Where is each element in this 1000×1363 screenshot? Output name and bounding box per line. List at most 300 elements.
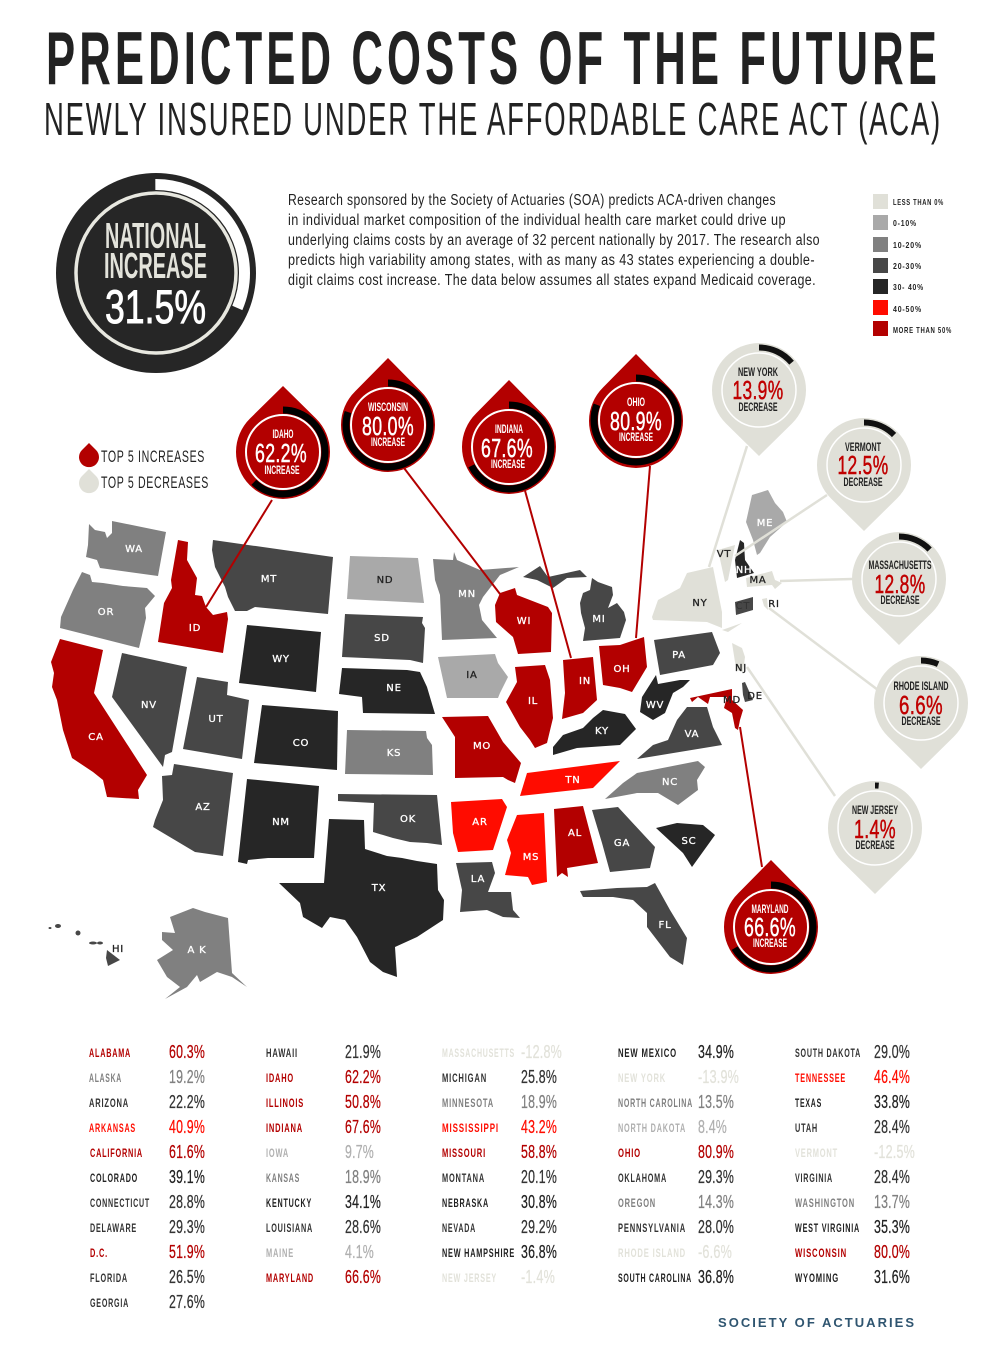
state: DE: [742, 682, 763, 702]
state: WY: [239, 625, 321, 692]
data table: column 4: [618, 1042, 739, 1287]
pin: Wisconsin: INCREASE: [371, 437, 405, 449]
row: Rhode Island: RHODE ISLAND: [618, 1246, 686, 1260]
row: Connecticut: CONNECTICUT: [90, 1196, 150, 1210]
top 5 legend: TOP 5 DECREASES: [101, 474, 209, 492]
row: Iowa: [266, 1142, 374, 1162]
row: Indiana: 67.6%: [345, 1117, 381, 1137]
colour legend: MORE THAN 50%: [893, 325, 952, 335]
state: MT: [212, 540, 333, 614]
pin: New York: 13.9%: [732, 375, 784, 405]
row: South Carolina: SOUTH CAROLINA: [618, 1271, 692, 1285]
row: West Virginia: 35.3%: [874, 1217, 910, 1237]
intro paragraph: underlying claims costs by an average of 32 percent nationally by 2017. The research also: [288, 232, 820, 249]
state: OR: OR: [98, 607, 114, 618]
row: North Carolina: 13.5%: [698, 1092, 734, 1112]
row: New Mexico: [618, 1042, 734, 1062]
row: D.C.: D.C.: [90, 1246, 108, 1260]
state: UT: UT: [208, 714, 224, 725]
row: Colorado: COLORADO: [90, 1171, 138, 1185]
state: KY: KY: [595, 726, 609, 737]
row: Nevada: NEVADA: [442, 1221, 476, 1235]
state: MA: MA: [749, 575, 767, 586]
row: New Jersey: NEW JERSEY: [442, 1271, 497, 1285]
national increase badge: 31.5%: [105, 280, 206, 333]
state: MS: MS: [523, 852, 539, 863]
pin: Wisconsin: [341, 358, 435, 472]
row: California: [90, 1142, 205, 1162]
state: AL: [554, 806, 598, 877]
row: Alaska: ALASKA: [89, 1071, 122, 1085]
row: Michigan: [442, 1067, 557, 1087]
state: IN: IN: [579, 676, 591, 687]
state: IL: [506, 665, 553, 748]
row: Idaho: 62.2%: [345, 1067, 381, 1087]
state: CO: CO: [293, 738, 309, 749]
state: MT: MT: [261, 574, 277, 585]
intro paragraph: in individual market composition of the individual health care market could drive up: [288, 212, 786, 229]
row: Illinois: 50.8%: [345, 1092, 381, 1112]
national increase badge: [56, 173, 256, 373]
row: Washington: [795, 1192, 910, 1212]
state: ND: ND: [377, 575, 393, 586]
state: OH: OH: [614, 664, 630, 675]
state: MN: MN: [458, 589, 476, 600]
row: Alabama: ALABAMA: [89, 1046, 131, 1060]
state: AR: [451, 799, 507, 852]
row: New Hampshire: NEW HAMPSHIRE: [442, 1246, 515, 1260]
state: MS: [505, 813, 547, 885]
state: TN: [520, 761, 620, 796]
state: MD: MD: [723, 695, 741, 706]
row: California: 61.6%: [169, 1142, 205, 1162]
row: Georgia: GEORGIA: [90, 1296, 129, 1310]
state: WV: WV: [646, 700, 664, 711]
row: Wisconsin: [795, 1242, 910, 1262]
state: WA: WA: [125, 544, 143, 555]
pin: Maryland: INCREASE: [753, 938, 787, 950]
pin: Indiana: INDIANA: [495, 424, 523, 436]
pin: Maryland: MARYLAND: [752, 904, 788, 916]
state: OH: [599, 637, 647, 692]
row: New York: [618, 1067, 739, 1087]
row: South Carolina: [618, 1267, 734, 1287]
state: KS: KS: [387, 748, 401, 759]
row: Pennsylvania: PENNSYLVANIA: [618, 1221, 686, 1235]
top 5 legend: [79, 443, 209, 493]
pin: Idaho: IDAHO: [272, 429, 294, 441]
data table: column 3: [442, 1042, 562, 1287]
row: Nebraska: [442, 1192, 557, 1212]
state: IA: IA: [466, 670, 478, 681]
colour legend: 0-10%: [893, 218, 917, 228]
pin: Indiana: [462, 380, 556, 494]
row: Alaska: [89, 1067, 205, 1087]
row: Hawaii: HAWAII: [266, 1046, 298, 1060]
row: New Hampshire: [442, 1242, 557, 1262]
row: Oklahoma: 29.3%: [698, 1167, 734, 1187]
map of states: [48, 490, 787, 999]
row: Oregon: 14.3%: [698, 1192, 734, 1212]
row: D.C.: 51.9%: [169, 1242, 205, 1262]
pin: New York: DECREASE: [738, 402, 778, 414]
row: Illinois: ILLINOIS: [266, 1096, 304, 1110]
row: Illinois: [266, 1092, 381, 1112]
pin: Ohio: OHIO: [627, 397, 645, 409]
pin: Massachusetts: DECREASE: [880, 595, 920, 607]
pin: New Jersey: [828, 781, 922, 894]
row: Vermont: -12.5%: [874, 1142, 915, 1162]
state: SD: SD: [374, 633, 390, 644]
state: OR: [60, 572, 155, 648]
row: Florida: FLORIDA: [90, 1271, 128, 1285]
pin: Vermont: 12.5%: [838, 450, 888, 480]
row: Mississippi: 43.2%: [521, 1117, 557, 1137]
row: Florida: 26.5%: [169, 1267, 205, 1287]
state: MO: MO: [473, 741, 491, 752]
row: Kentucky: 34.1%: [345, 1192, 381, 1212]
state: KS: [345, 730, 433, 775]
row: Delaware: [90, 1217, 205, 1237]
intro paragraph: digit claims cost increase. The data below assumes all states expand Medicaid coverage.: [288, 272, 816, 289]
row: Rhode Island: [618, 1242, 732, 1262]
top 5 legend: TOP 5 INCREASES: [101, 448, 205, 466]
state: IL: IL: [528, 696, 538, 707]
state: WV: [640, 675, 690, 720]
row: Georgia: 27.6%: [169, 1292, 205, 1312]
row: Indiana: INDIANA: [266, 1121, 303, 1135]
state: AK: [157, 908, 247, 999]
state: UT: [183, 677, 249, 759]
leader lines: [206, 446, 878, 867]
state: KY: [553, 710, 636, 755]
state: RI: RI: [768, 599, 780, 610]
state: VT: VT: [717, 549, 731, 560]
row: Massachusetts: -12.8%: [521, 1042, 562, 1062]
state: NE: [339, 668, 435, 714]
row: Wisconsin: 80.0%: [874, 1242, 910, 1262]
state: NH: NH: [736, 565, 752, 576]
state: WY: WY: [272, 654, 290, 665]
row: Maryland: [266, 1267, 381, 1287]
row: Rhode Island: -6.6%: [698, 1242, 732, 1262]
state: AZ: AZ: [195, 802, 211, 813]
pin: Indiana: INCREASE: [491, 459, 525, 471]
state: MD: [690, 689, 743, 730]
state: CO: [254, 705, 338, 770]
logo: Society of Actuaries: SOCIETY OF ACTUARIES: [718, 1315, 914, 1330]
pin: Massachusetts: 12.8%: [874, 569, 926, 599]
row: Maine: MAINE: [266, 1246, 294, 1260]
row: Minnesota: MINNESOTA: [442, 1096, 494, 1110]
row: Arkansas: ARKANSAS: [89, 1121, 136, 1135]
state: HI: [48, 924, 124, 966]
state: HI: HI: [112, 944, 124, 955]
state: OK: [338, 794, 442, 845]
pin: Wisconsin: WISCONSIN: [368, 402, 408, 414]
row: Nebraska: 30.8%: [521, 1192, 557, 1212]
pin: Ohio: [589, 354, 683, 468]
row: Kansas: 18.9%: [345, 1167, 381, 1187]
state: VT: [717, 545, 735, 582]
state: ID: ID: [189, 623, 201, 634]
row: North Dakota: [618, 1117, 727, 1137]
row: Nevada: 29.2%: [521, 1217, 557, 1237]
row: Tennessee: TENNESSEE: [795, 1071, 846, 1085]
row: Pennsylvania: [618, 1217, 734, 1237]
pin: Vermont: [817, 418, 911, 531]
pin: Wisconsin: 80.0%: [362, 411, 414, 441]
row: Idaho: IDAHO: [266, 1071, 294, 1085]
row: Iowa: IOWA: [266, 1146, 289, 1160]
state: TX: [279, 819, 444, 977]
pin: Idaho: [236, 386, 330, 499]
state: NY: [652, 567, 742, 632]
row: North Dakota: 8.4%: [698, 1117, 727, 1137]
pin: Maryland: [724, 860, 818, 974]
row: Arizona: [89, 1092, 205, 1112]
row: Connecticut: 28.8%: [169, 1192, 205, 1212]
row: Florida: [90, 1267, 205, 1287]
row: Tennessee: 46.4%: [874, 1067, 910, 1087]
state: AL: AL: [568, 828, 582, 839]
state: NE: NE: [386, 683, 402, 694]
state: CT: CT: [736, 601, 750, 612]
row: South Carolina: 36.8%: [698, 1267, 734, 1287]
state: WI: WI: [517, 616, 531, 627]
row: Oregon: [618, 1192, 734, 1212]
pin: Vermont: VERMONT: [845, 442, 881, 454]
pin: New York: NEW YORK: [738, 367, 778, 379]
row: Oklahoma: OKLAHOMA: [618, 1171, 667, 1185]
row: Arizona: 22.2%: [169, 1092, 205, 1112]
row: California: CALIFORNIA: [90, 1146, 143, 1160]
row: Montana: [442, 1167, 557, 1187]
row: Alaska: 19.2%: [169, 1067, 205, 1087]
intro paragraph: [288, 192, 820, 289]
national increase badge: NATIONAL: [105, 215, 206, 256]
row: Michigan: 25.8%: [521, 1067, 557, 1087]
state: NM: NM: [272, 817, 290, 828]
state: VA: [637, 707, 722, 759]
pin: Rhode Island: DECREASE: [902, 716, 941, 728]
state: NV: NV: [141, 700, 157, 711]
row: Kansas: [266, 1167, 381, 1187]
row: Ohio: OHIO: [618, 1146, 641, 1160]
state: NH: [735, 540, 754, 578]
row: Nevada: [442, 1217, 557, 1237]
state: AZ: [153, 764, 233, 856]
data table: column 1: [89, 1042, 205, 1312]
row: Hawaii: [266, 1042, 381, 1062]
pin: Ohio: 80.9%: [610, 406, 662, 436]
state: SD: [342, 614, 425, 663]
pin: Indiana: 67.6%: [481, 433, 533, 463]
state: ID: [158, 540, 228, 653]
row: Massachusetts: MASSACHUSETTS: [442, 1046, 515, 1060]
colour legend: 20-30%: [893, 261, 922, 271]
state: NC: [605, 761, 705, 805]
row: Washington: 13.7%: [874, 1192, 910, 1212]
row: Virginia: 28.4%: [874, 1167, 910, 1187]
state: IA: [438, 654, 508, 698]
row: Delaware: 29.3%: [169, 1217, 205, 1237]
row: Wyoming: WYOMING: [795, 1271, 839, 1285]
state: MA: [746, 571, 782, 589]
state: NY: NY: [692, 598, 708, 609]
colour legend: [873, 194, 952, 336]
colour legend: LESS THAN 0%: [893, 197, 944, 207]
row: West Virginia: [795, 1217, 910, 1237]
pin: New Jersey: 1.4%: [854, 814, 896, 844]
row: Pennsylvania: 28.0%: [698, 1217, 734, 1237]
row: Colorado: 39.1%: [169, 1167, 205, 1187]
state: WA: [86, 521, 166, 576]
row: Wisconsin: WISCONSIN: [795, 1246, 847, 1260]
colour legend: 30- 40%: [893, 282, 924, 292]
row: North Dakota: NORTH DAKOTA: [618, 1121, 686, 1135]
row: Ohio: 80.9%: [698, 1142, 734, 1162]
state: SC: [656, 823, 715, 867]
state: LA: LA: [471, 874, 485, 885]
pin: Massachusetts: [852, 532, 946, 645]
row: Louisiana: [266, 1217, 381, 1237]
row: Virginia: [795, 1167, 910, 1187]
row: Wyoming: [795, 1267, 910, 1287]
row: Idaho: [266, 1067, 381, 1087]
row: South Dakota: [795, 1042, 910, 1062]
state: PA: PA: [672, 650, 686, 661]
state: PA: [654, 632, 720, 675]
state: NJ: [732, 643, 747, 674]
row: Missouri: MISSOURI: [442, 1146, 486, 1160]
row: Utah: 28.4%: [874, 1117, 910, 1137]
state: VA: VA: [685, 729, 699, 740]
row: New Jersey: -1.4%: [521, 1267, 555, 1287]
pin: Maryland: 66.6%: [744, 912, 796, 942]
row: Montana: MONTANA: [442, 1171, 485, 1185]
row: New York: -13.9%: [698, 1067, 739, 1087]
intro paragraph: Research sponsored by the Society of Actuaries (SOA) predicts ACA-driven changes: [288, 192, 776, 209]
state: DE: DE: [747, 691, 763, 702]
state: RI: [762, 598, 780, 610]
row: Arkansas: [89, 1117, 205, 1137]
row: Maryland: MARYLAND: [266, 1271, 314, 1285]
row: Virginia: VIRGINIA: [795, 1171, 833, 1185]
row: Louisiana: LOUISIANA: [266, 1221, 313, 1235]
pin: Ohio: INCREASE: [619, 432, 653, 444]
row: Oregon: OREGON: [618, 1196, 656, 1210]
row: Utah: [795, 1117, 910, 1137]
state: MO: [442, 716, 521, 783]
row: Delaware: DELAWARE: [90, 1221, 137, 1235]
row: South Dakota: SOUTH DAKOTA: [795, 1046, 861, 1060]
pin: New York: [712, 343, 806, 456]
data table: column 5: [795, 1042, 915, 1287]
row: South Dakota: 29.0%: [874, 1042, 910, 1062]
data table: column 2: [266, 1042, 381, 1287]
state: GA: [592, 807, 655, 872]
pin: Vermont: DECREASE: [844, 477, 883, 489]
row: New Hampshire: 36.8%: [521, 1242, 557, 1262]
state: CA: [51, 639, 147, 799]
pin: Rhode Island: RHODE ISLAND: [894, 681, 948, 693]
row: Vermont: [795, 1142, 915, 1162]
state: NC: NC: [662, 777, 678, 788]
row: Connecticut: [90, 1192, 205, 1212]
row: Maine: 4.1%: [345, 1242, 374, 1262]
state: NM: [238, 779, 319, 864]
intro paragraph: predicts high variability among states, with as many as 43 states experiencing a double-: [288, 252, 815, 269]
state: NJ: NJ: [735, 663, 747, 674]
state: MI: [523, 566, 626, 641]
row: New Mexico: NEW MEXICO: [618, 1046, 677, 1060]
row: North Carolina: NORTH CAROLINA: [618, 1096, 693, 1110]
pin: Rhode Island: [874, 656, 968, 769]
row: New Jersey: [442, 1267, 555, 1287]
state: MI: MI: [592, 614, 606, 625]
row: Missouri: 58.8%: [521, 1142, 557, 1162]
state: NV: [112, 653, 187, 767]
state: FL: [580, 883, 687, 965]
row: Oklahoma: [618, 1167, 734, 1187]
state: TN: TN: [564, 775, 581, 786]
row: Minnesota: 18.9%: [521, 1092, 557, 1112]
national increase badge: INCREASE: [104, 245, 207, 286]
pin: Idaho: 62.2%: [255, 438, 307, 468]
row: Arkansas: 40.9%: [169, 1117, 205, 1137]
row: Alabama: 60.3%: [169, 1042, 205, 1062]
state: WI: [495, 588, 552, 654]
state: SC: SC: [682, 836, 696, 847]
state: AR: AR: [472, 817, 488, 828]
row: Texas: 33.8%: [874, 1092, 910, 1112]
state: OK: OK: [400, 814, 416, 825]
row: Texas: [795, 1092, 910, 1112]
state: AK: A K: [188, 945, 206, 956]
row: Massachusetts: [442, 1042, 562, 1062]
row: Arizona: ARIZONA: [89, 1096, 129, 1110]
row: Mississippi: MISSISSIPPI: [442, 1121, 499, 1135]
row: New York: NEW YORK: [618, 1071, 666, 1085]
pin: New Jersey: NEW JERSEY: [852, 805, 898, 817]
row: Hawaii: 21.9%: [345, 1042, 381, 1062]
row: Washington: WASHINGTON: [795, 1196, 855, 1210]
row: Ohio: [618, 1142, 734, 1162]
state: TX: TX: [371, 883, 386, 894]
row: Colorado: [90, 1167, 205, 1187]
state: ME: [746, 490, 787, 555]
row: Kentucky: KENTUCKY: [266, 1196, 312, 1210]
row: Maryland: 66.6%: [345, 1267, 381, 1287]
row: Wyoming: 31.6%: [874, 1267, 910, 1287]
colour legend: 40-50%: [893, 304, 922, 314]
row: Louisiana: 28.6%: [345, 1217, 381, 1237]
state: ME: ME: [757, 518, 773, 529]
state: GA: GA: [614, 838, 630, 849]
pin: New Jersey: DECREASE: [856, 840, 895, 852]
row: Mississippi: [442, 1117, 557, 1137]
state: CA: CA: [88, 732, 104, 743]
pin: Rhode Island: 6.6%: [899, 690, 943, 720]
row: Kentucky: [266, 1192, 381, 1212]
pin: Idaho: INCREASE: [264, 465, 300, 477]
pin: Massachusetts: MASSACHUSETTS: [868, 560, 932, 572]
row: Texas: TEXAS: [795, 1096, 822, 1110]
row: Minnesota: [442, 1092, 557, 1112]
row: Georgia: [90, 1292, 205, 1312]
row: West Virginia: WEST VIRGINIA: [795, 1221, 860, 1235]
